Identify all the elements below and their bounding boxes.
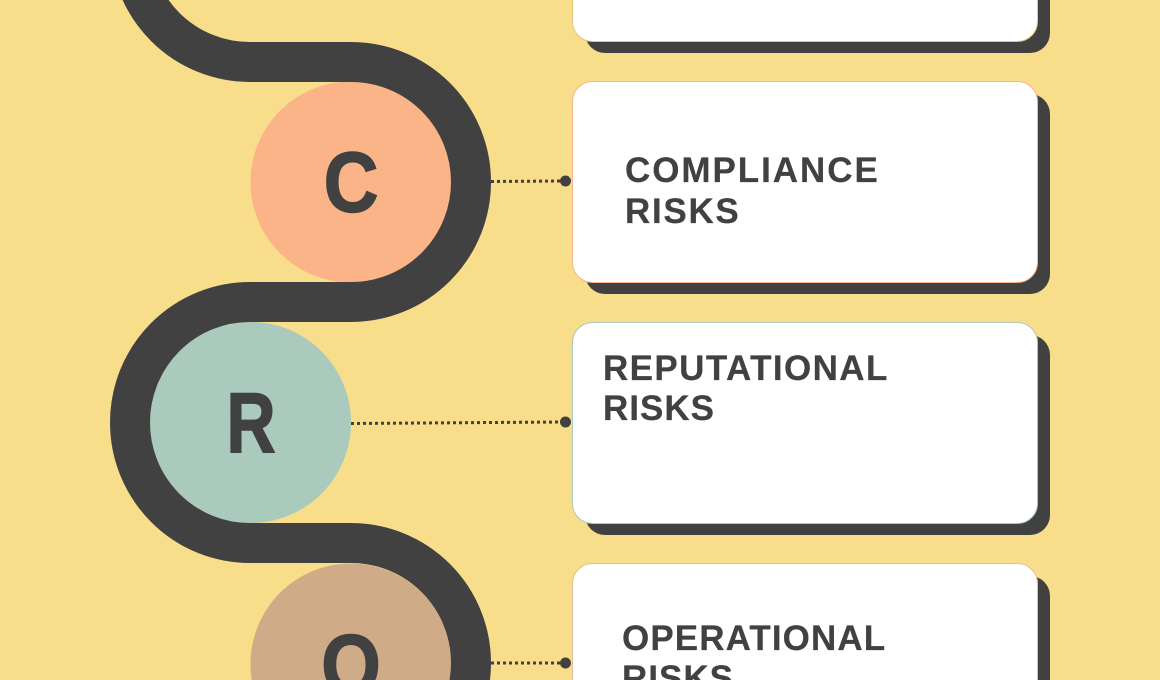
- circle: R: [150, 322, 351, 523]
- card: compliance risks: [572, 82, 1050, 294]
- circle: O: [250, 564, 452, 680]
- heading: operational risks: OPERATIONAL: [622, 619, 886, 658]
- card: top (cropped): [572, 0, 1050, 53]
- circle: C: C: [324, 135, 378, 231]
- heading: reputational risks: RISKS: [603, 389, 715, 428]
- winding path: [130, 0, 471, 680]
- heading: compliance risks: RISKS: [625, 192, 740, 231]
- heading: compliance risks: COMPLIANCE: [625, 151, 880, 190]
- circle: R: R: [226, 376, 276, 471]
- circle: C: [250, 82, 452, 282]
- connector: reputational: [351, 416, 571, 428]
- connector: compliance: [491, 176, 571, 186]
- card: operational risks: [572, 564, 1050, 680]
- heading: reputational risks: REPUTATIONAL: [603, 349, 889, 388]
- card: reputational risks: [572, 322, 1050, 535]
- connector: operational: [491, 658, 571, 668]
